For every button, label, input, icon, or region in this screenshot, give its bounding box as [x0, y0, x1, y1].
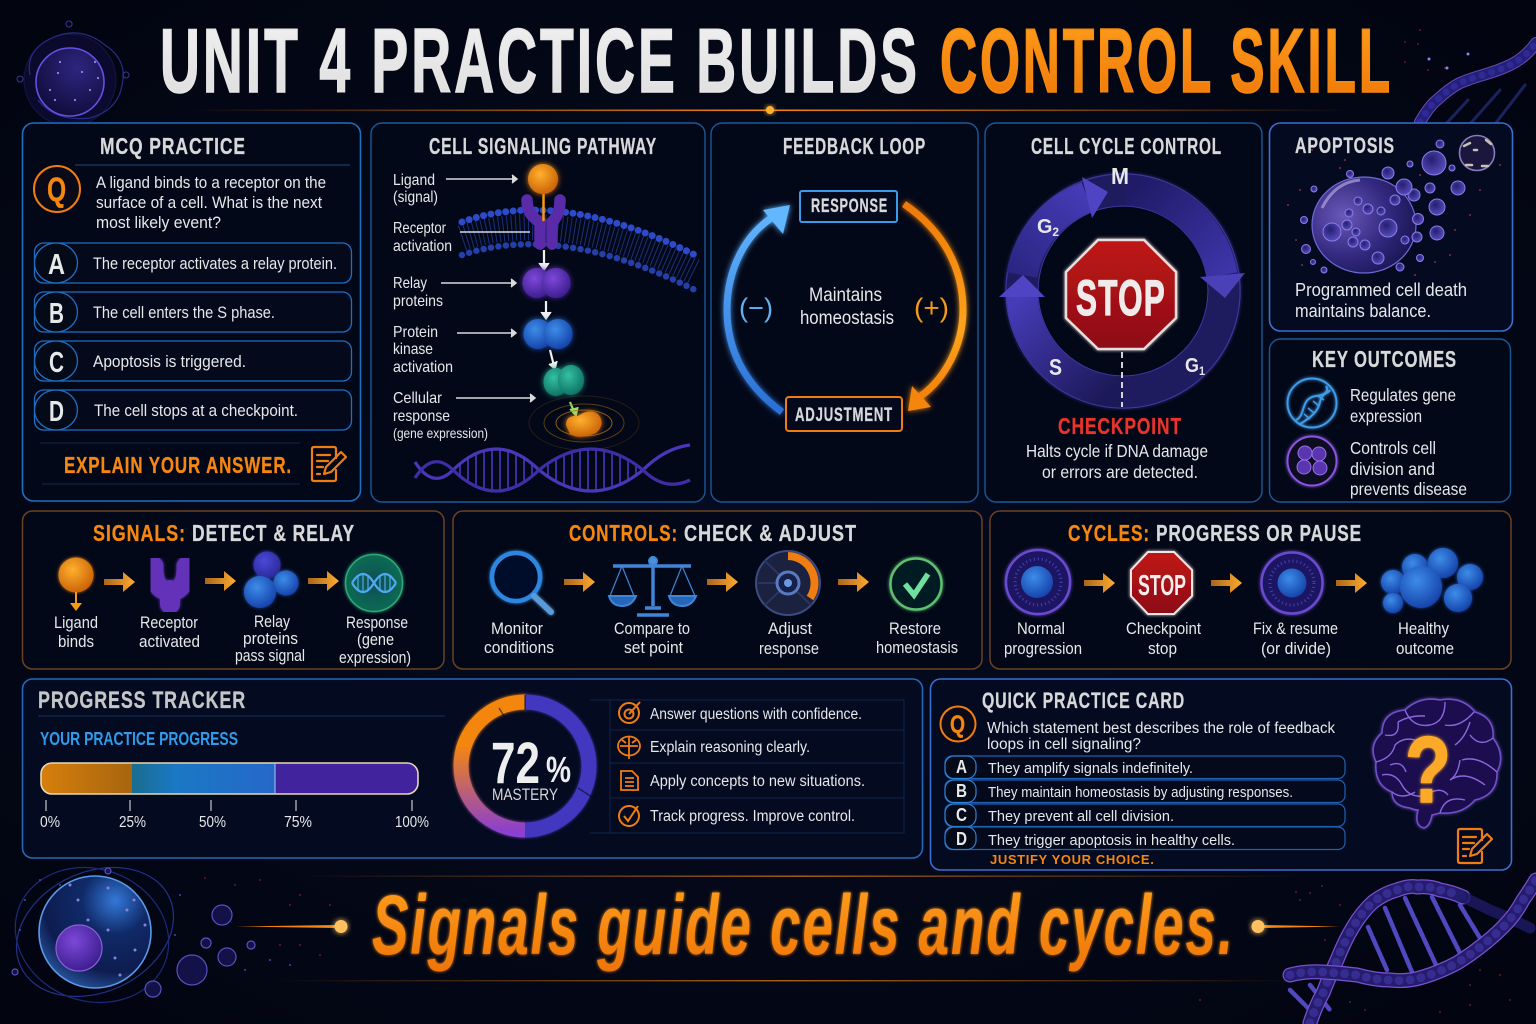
response box [800, 191, 897, 222]
option D: D [49, 396, 64, 428]
icon: note and pencil [1458, 829, 1492, 863]
outcome text 1 [1350, 385, 1456, 426]
option C [34, 341, 352, 381]
checkpoint label: CHECKPOINT [1058, 413, 1182, 439]
step labels: Ligand [54, 614, 98, 632]
icon: relay proteins [244, 552, 298, 608]
controls heading [569, 520, 857, 546]
icon: check circle [619, 806, 639, 826]
controls heading: CHECK & ADJUST [684, 520, 857, 546]
progress scale: 75% [284, 814, 312, 831]
step labels: Restore [889, 619, 941, 638]
step labels: conditions [484, 638, 554, 657]
mastery donut [461, 695, 592, 830]
card option B [945, 780, 1345, 802]
signals heading: DETECT & RELAY [192, 520, 355, 546]
step labels: Response [346, 614, 408, 632]
step labels: homeostasis [876, 638, 958, 657]
icon: brain with question mark [1373, 699, 1501, 828]
arrow [707, 572, 738, 592]
cycles heading: PROGRESS OR PAUSE [1156, 520, 1362, 546]
outcome text 1: expression [1350, 406, 1422, 426]
card heading: QUICK PRACTICE CARD [982, 688, 1185, 713]
icon: resumed cell [1262, 552, 1322, 614]
option A: The receptor activates a relay protein. [93, 254, 337, 273]
step labels: outcome [1396, 639, 1454, 658]
decorative DNA bottom right [1290, 880, 1536, 1023]
feedback heading: FEEDBACK LOOP [783, 133, 926, 159]
step labels [54, 613, 411, 667]
panel: feedback loop [711, 123, 978, 502]
panel: cell signaling pathway [371, 123, 705, 502]
step labels: Compare to [614, 619, 690, 638]
goal 2: Explain reasoning clearly. [650, 739, 810, 756]
option B [34, 292, 352, 332]
icon: brain with question mark: ? [1405, 717, 1451, 822]
apoptosis caption: maintains balance. [1295, 301, 1431, 321]
card option C: They prevent all cell division. [988, 808, 1174, 825]
mastery donut: 72 [491, 731, 540, 796]
outcome text 2: Controls cell [1350, 438, 1436, 458]
icon: brain [618, 736, 640, 759]
pathway labels: response [393, 408, 450, 425]
arrow [564, 572, 595, 592]
icon: dividing cells [1288, 436, 1336, 486]
orange arrow [904, 204, 963, 411]
pathway labels: (gene expression) [393, 425, 488, 441]
checkpoint description: Halts cycle if DNA damage [1026, 441, 1208, 461]
arrow [838, 572, 869, 592]
icon: DNA [1288, 378, 1336, 428]
pathway labels: Ligand [393, 172, 435, 189]
pathway labels: proteins [393, 293, 443, 310]
card option A [945, 756, 1345, 778]
step labels: Fix & resume [1253, 619, 1338, 638]
step labels: Adjust [768, 619, 812, 638]
panel: progress tracker [22, 679, 922, 858]
card question [987, 720, 1335, 753]
mastery donut: MASTERY [492, 785, 558, 804]
step labels: expression) [339, 649, 411, 667]
outcome text 1: Regulates gene [1350, 385, 1456, 405]
step labels: Monitor [491, 619, 543, 638]
panel: cycles [990, 511, 1511, 669]
option A [34, 243, 352, 283]
card option A: A [956, 757, 967, 777]
S label: S [1049, 354, 1062, 380]
cycles heading: CYCLES: [1068, 520, 1150, 546]
cycles heading [1068, 520, 1362, 546]
cellular response [529, 396, 639, 450]
cycle heading: CELL CYCLE CONTROL [1031, 133, 1222, 159]
card option C [945, 804, 1345, 826]
option B: The cell enters the S phase. [93, 303, 275, 322]
title: UNIT 4 PRACTICE BUILDS [160, 11, 920, 112]
decorative cell top left [17, 21, 129, 126]
arrow [1084, 573, 1115, 593]
stop sign: STOP [1076, 270, 1166, 326]
step labels: pass signal [235, 647, 305, 665]
positive sign: (+) [914, 293, 949, 323]
pathway arrows [441, 175, 578, 416]
panel: MCQ practice [22, 123, 360, 501]
card option D [945, 827, 1345, 850]
card option B: They maintain homeostasis by adjusting responses. [988, 784, 1293, 801]
card option D: D [956, 829, 967, 849]
icon: normal cell [1006, 550, 1070, 614]
option A: A [48, 249, 65, 281]
signals heading [93, 520, 355, 546]
tracker heading: PROGRESS TRACKER [38, 687, 246, 714]
Q badge [940, 706, 976, 742]
ligand [528, 164, 558, 194]
step labels: Healthy [1398, 619, 1449, 638]
checkpoint description [1026, 441, 1208, 482]
card option C: C [956, 805, 967, 825]
panel: quick practice card [930, 679, 1512, 870]
negative sign: (−) [739, 293, 773, 323]
MCQ heading: MCQ PRACTICE [100, 133, 246, 159]
membrane [462, 210, 695, 290]
controls heading: CONTROLS: [569, 520, 678, 546]
apoptosis heading: APOPTOSIS [1295, 133, 1395, 158]
blue arrow [727, 205, 790, 412]
response box: RESPONSE [811, 196, 888, 217]
third protein [544, 365, 584, 396]
icon: document [621, 771, 638, 790]
arrow [1336, 573, 1367, 593]
signals heading: SIGNALS: [93, 520, 186, 546]
decorative DNA top right [1420, 43, 1536, 125]
step labels: (gene [357, 631, 394, 649]
step labels: Checkpoint [1126, 619, 1201, 638]
progress subheading: YOUR PRACTICE PROGRESS [40, 728, 238, 749]
card question: loops in cell signaling? [987, 736, 1141, 753]
adjustment box: ADJUSTMENT [795, 405, 893, 426]
pathway labels: Relay [393, 275, 427, 292]
step labels: stop [1148, 639, 1177, 658]
adjustment box [786, 397, 902, 431]
option C: C [49, 347, 64, 379]
step labels: Relay [254, 613, 291, 631]
apoptotic cell illustration [1288, 136, 1500, 275]
panel: controls [453, 511, 982, 669]
pathway labels: activation [393, 238, 452, 255]
apoptosis caption [1295, 280, 1467, 321]
step labels: (or divide) [1261, 639, 1331, 658]
step labels: Receptor [140, 614, 198, 632]
icon: stop sign [1131, 552, 1192, 614]
arrow [205, 571, 236, 591]
option C: Apoptosis is triggered. [93, 352, 246, 371]
icon: ligand [58, 558, 94, 611]
pathway labels: Receptor [393, 220, 447, 237]
card question: Which statement best describes the role of feedback [987, 720, 1335, 737]
option D [34, 390, 352, 430]
pathway labels: kinase [393, 341, 433, 358]
step labels: binds [58, 633, 94, 651]
DNA helix [415, 445, 690, 491]
pathway labels: (signal) [393, 189, 438, 206]
question text: surface of a cell. What is the next [96, 193, 322, 212]
explain your answer: EXPLAIN YOUR ANSWER. [64, 452, 292, 478]
option D: The cell stops at a checkpoint. [94, 401, 298, 420]
Q badge [34, 166, 80, 212]
panel: signals [22, 511, 444, 669]
icon: check [890, 558, 942, 610]
arrow [1211, 573, 1242, 593]
icon: receptor [154, 566, 186, 604]
question text: A ligand binds to a receptor on the [96, 173, 326, 192]
step labels [484, 619, 958, 658]
maintains homeostasis: Maintains [809, 285, 882, 306]
decorative cell bottom left [0, 843, 290, 1024]
icon: note and pencil [312, 447, 346, 481]
pathway labels: Protein [393, 324, 438, 341]
arrow [104, 572, 135, 592]
step labels: set point [624, 638, 683, 657]
maintains homeostasis: homeostasis [800, 308, 894, 329]
cycle ring [999, 174, 1245, 408]
question text [96, 173, 326, 232]
justify your choice: JUSTIFY YOUR CHOICE. [990, 852, 1155, 867]
option B: B [49, 298, 64, 330]
progress scale: 25% [119, 814, 146, 831]
goal 3: Apply concepts to new situations. [650, 773, 865, 790]
outcome text 2: division and [1350, 459, 1435, 479]
relay protein [522, 268, 570, 298]
progress scale [40, 800, 429, 831]
icon: healthy cell cluster [1381, 548, 1483, 613]
G2 label: 2 [1052, 225, 1059, 239]
checkpoint description: or errors are detected. [1042, 462, 1198, 482]
G1 label: 1 [1199, 364, 1205, 378]
M label: M [1111, 163, 1129, 189]
card option A: They amplify signals indefinitely. [988, 760, 1193, 777]
receptor [527, 190, 560, 244]
step labels: progression [1004, 639, 1082, 658]
icon: magnifier [492, 553, 551, 612]
icon: gene expression [346, 554, 402, 612]
goal 1: Answer questions with confidence. [650, 706, 862, 723]
pathway labels: activation [393, 359, 453, 376]
left footer spark [235, 920, 348, 933]
icon: gauge [756, 551, 820, 615]
step labels: Normal [1017, 619, 1065, 638]
progress scale: 0% [40, 814, 60, 831]
outcome text 2: prevents disease [1350, 479, 1467, 499]
maintains homeostasis [800, 285, 894, 329]
panel: key outcomes [1270, 339, 1510, 502]
pathway labels [393, 172, 488, 441]
progress scale: 100% [395, 814, 429, 831]
arrow [308, 571, 339, 591]
panel: cell cycle control [985, 123, 1262, 502]
Q badge: Q [47, 171, 67, 209]
step labels: proteins [243, 630, 298, 648]
card option D: They trigger apoptosis in healthy cells. [988, 832, 1235, 849]
question text: most likely event? [96, 213, 221, 232]
right footer spark [1252, 920, 1340, 933]
Q badge: Q [950, 711, 966, 739]
icon: stop sign: STOP [1138, 570, 1186, 602]
progress bar [41, 763, 418, 794]
mastery donut: % [546, 749, 571, 790]
G1 label: G [1185, 355, 1201, 377]
stop sign [1066, 240, 1176, 349]
protein kinase [524, 319, 572, 349]
step labels: activated [139, 633, 200, 651]
pathway heading: CELL SIGNALING PATHWAY [429, 133, 657, 159]
step labels: response [759, 639, 819, 658]
icon: balance scales [609, 556, 696, 615]
progress scale: 50% [199, 814, 226, 831]
outcomes heading: KEY OUTCOMES [1312, 346, 1457, 372]
goal 4: Track progress. Improve control. [650, 808, 855, 825]
panel: apoptosis [1270, 123, 1512, 331]
G2 label: G [1037, 216, 1053, 238]
step labels [1004, 619, 1454, 658]
apoptosis caption: Programmed cell death [1295, 280, 1467, 300]
icon: target [619, 702, 640, 723]
outcome text 2 [1350, 438, 1467, 499]
pathway labels: Cellular [393, 390, 443, 407]
card option B: B [956, 781, 967, 801]
